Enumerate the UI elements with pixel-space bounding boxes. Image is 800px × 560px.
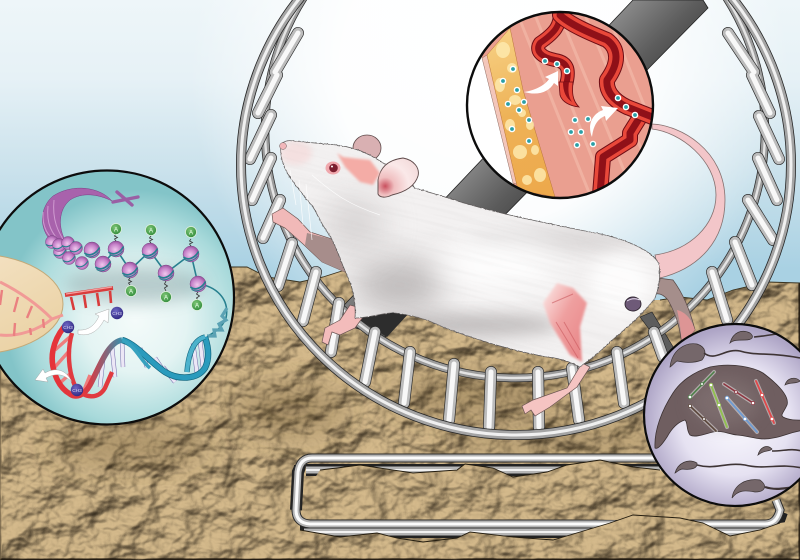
skin area <box>468 57 514 184</box>
bedding ground <box>0 266 800 560</box>
chromatin fibre arc <box>42 188 112 244</box>
white arrow into capillary <box>524 71 558 94</box>
RNA comb <box>65 287 113 310</box>
histone tail squiggles <box>114 234 200 300</box>
magnifier: sperm and chromosomes <box>644 324 800 506</box>
linker DNA and tail <box>108 255 228 334</box>
rat tag spot <box>625 297 641 311</box>
pink head patch <box>337 153 380 185</box>
rat <box>272 124 726 416</box>
muscle circle outline <box>467 12 653 198</box>
wheel back rim <box>265 0 765 378</box>
nucleosome chain <box>46 236 206 292</box>
acetyl group markers <box>110 224 202 310</box>
DNA double helix <box>52 327 208 396</box>
small sperm heads and tails <box>670 331 800 498</box>
red and teal strand <box>52 327 122 396</box>
wheel support stand <box>330 0 708 353</box>
rat hip patch <box>543 283 587 362</box>
rat far ear <box>353 135 381 161</box>
acetyl group markers: A <box>195 302 200 309</box>
base pair rungs <box>100 340 203 387</box>
red base pairs <box>54 335 90 390</box>
methyl groups: CH3 <box>112 311 122 317</box>
acetyl group markers: A <box>129 288 134 295</box>
muscle tissue <box>482 14 652 197</box>
germ cell circle outline <box>644 324 800 506</box>
nutrient particles <box>500 58 638 148</box>
rat lower front foot <box>322 305 368 345</box>
wheel rungs <box>250 33 779 427</box>
rat raised front arm and paw <box>272 208 345 272</box>
back hind leg lower pink <box>677 310 695 345</box>
rat tail <box>652 124 725 278</box>
rat lower hind leg and foot <box>522 363 590 416</box>
capillary tapered tip <box>559 82 579 107</box>
white arrow methyl removal <box>78 309 109 335</box>
skin strip <box>482 55 520 185</box>
teal strands <box>122 337 208 378</box>
acetyl group markers: A <box>164 294 169 301</box>
rat nose <box>280 143 286 149</box>
large sperm head <box>655 365 800 448</box>
rat eye <box>326 162 340 174</box>
methyl groups: CH3 <box>63 325 73 331</box>
acetyl group markers: A <box>114 226 119 233</box>
bedding inside and in front of tray <box>300 460 785 542</box>
rat body <box>280 140 661 368</box>
rat hip muscle <box>552 294 580 358</box>
rat near ear <box>378 158 418 197</box>
acetyl group markers: A <box>189 229 194 236</box>
magnifier: muscle and blood vessels <box>466 10 654 200</box>
sperm tails <box>697 333 800 489</box>
upper arm shadow <box>305 233 345 272</box>
nucleosome shadow <box>65 267 205 303</box>
wheel front rim <box>241 0 791 435</box>
methyl groups: CH3 <box>72 388 82 394</box>
epigenetics circle outline <box>0 170 234 424</box>
blood vessels <box>538 13 655 195</box>
rat whiskers <box>290 170 380 240</box>
capillary tip core <box>563 82 572 102</box>
acetyl group markers: A <box>149 227 154 234</box>
cage tray wire base <box>296 458 782 532</box>
methyl groups <box>62 307 123 396</box>
fat layer <box>487 28 555 197</box>
small helix coil <box>207 308 227 336</box>
magnifier: epigenetics <box>0 170 234 424</box>
white arrow methyl addition <box>35 369 72 382</box>
stained chromosomes <box>688 372 774 432</box>
nucleus inset with DNA replication <box>0 254 63 354</box>
chromosome <box>113 192 138 205</box>
rat back hind leg <box>650 278 695 345</box>
white arrow into vessel <box>590 106 618 137</box>
